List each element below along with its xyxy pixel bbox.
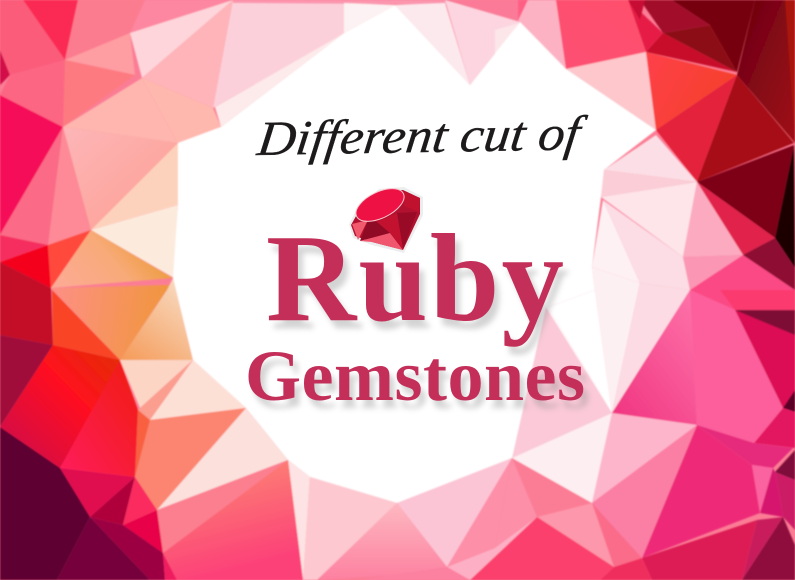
script heading: Different cut of bbox=[254, 105, 590, 166]
white facet right of the title bbox=[548, 290, 612, 413]
mosaic: bottom-center facets bbox=[288, 458, 537, 580]
mosaic: top-right facets bbox=[445, 0, 795, 310]
mosaic: lower-left facets bbox=[0, 230, 303, 580]
title: Gemstones: Gemstones bbox=[250, 344, 590, 424]
title: Gemstones: Gemstones bbox=[245, 336, 585, 416]
pink facet behind the title bbox=[512, 307, 612, 458]
title: Ruby: Ruby bbox=[271, 218, 569, 356]
title: Ruby: Ruby bbox=[266, 210, 564, 348]
mosaic: top-left facets bbox=[0, 0, 520, 278]
central white area bbox=[173, 5, 656, 503]
mosaic: bottom-right facets bbox=[470, 267, 795, 580]
icon: ruby gem bbox=[349, 182, 423, 253]
